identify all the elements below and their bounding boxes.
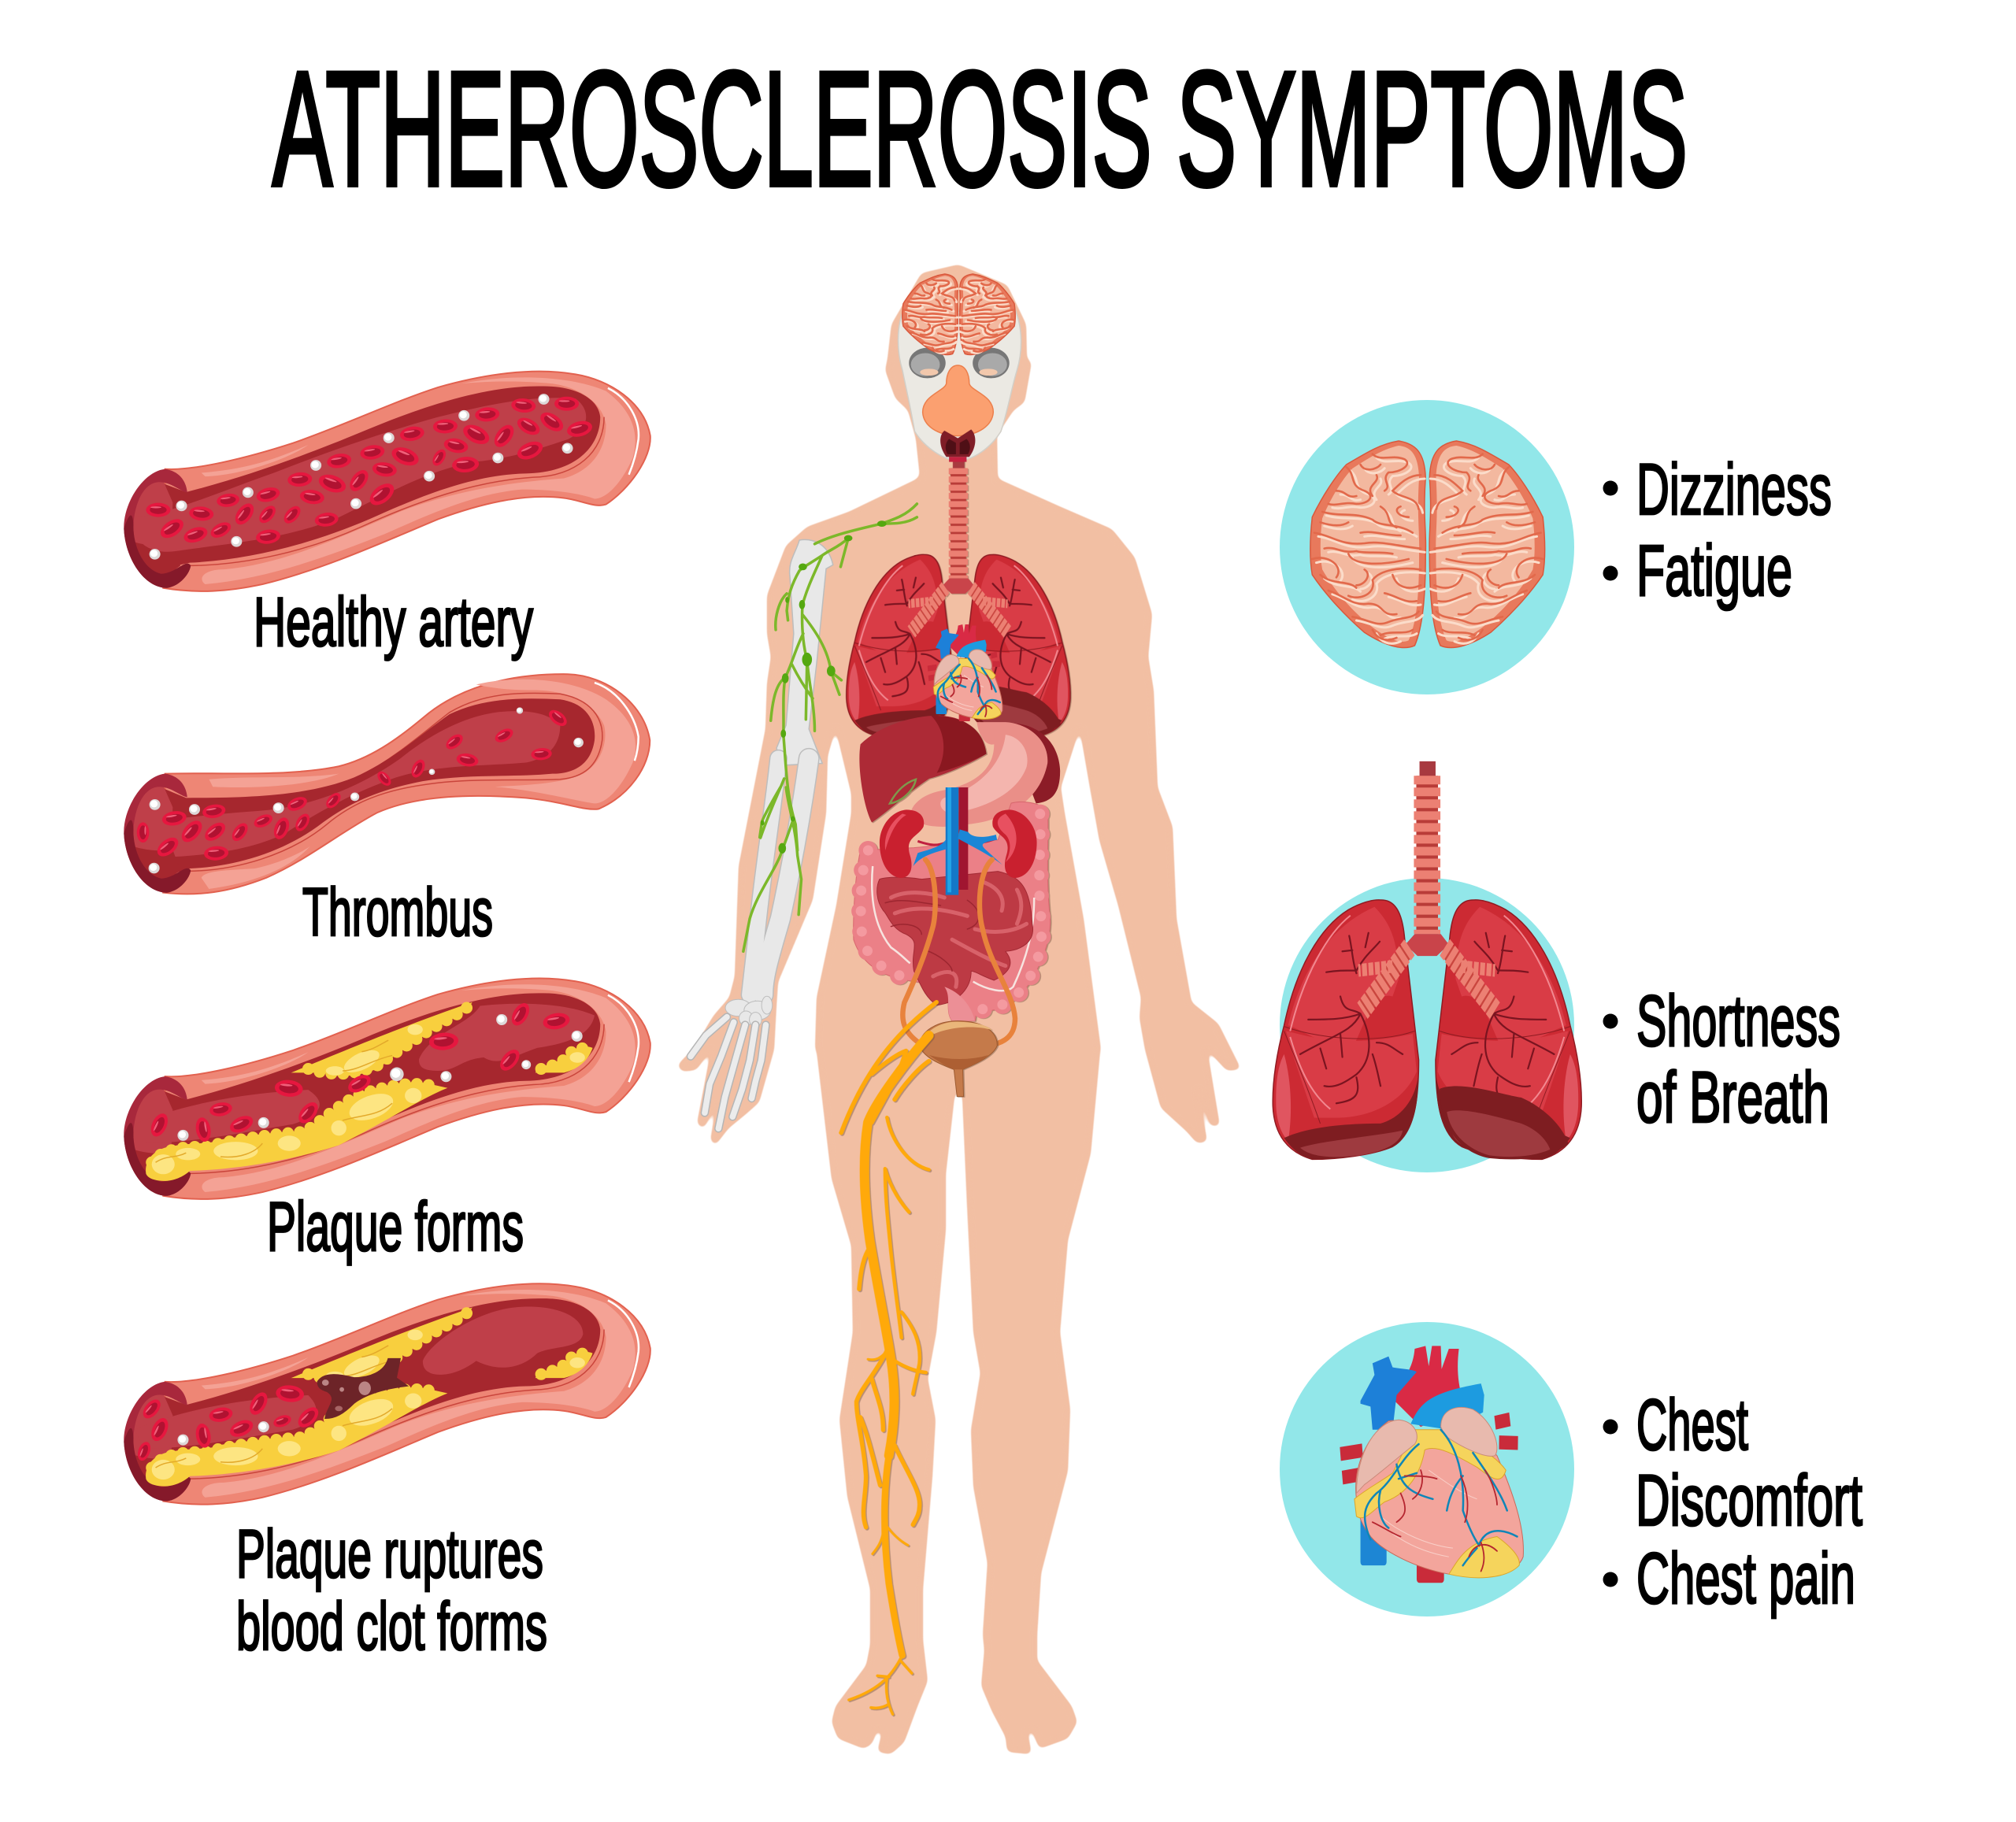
large and small intestine xyxy=(854,802,1051,1021)
artery: plaque forms xyxy=(124,978,650,1199)
panel: brain symptoms xyxy=(1280,400,1832,694)
brain in head xyxy=(902,274,1015,354)
circle backdrop: brain xyxy=(1280,400,1574,694)
blood clot xyxy=(318,1359,406,1418)
artery: plaque ruptures xyxy=(124,1283,650,1505)
list: chest discomfort and chest pain: Chest xyxy=(1636,1385,1748,1465)
panel: artery stages xyxy=(124,372,650,1665)
list: chest discomfort and chest pain: Chest pain xyxy=(1636,1539,1855,1619)
stomach xyxy=(910,722,1060,827)
circle backdrop: lungs xyxy=(1280,878,1574,1172)
icon: lungs xyxy=(1273,761,1581,1159)
nasal cavity xyxy=(923,365,993,436)
liver xyxy=(859,716,987,823)
list: chest discomfort and chest pain: Discomfort xyxy=(1636,1461,1862,1541)
body silhouette xyxy=(677,265,1241,1754)
lymph vessels xyxy=(743,504,917,951)
heart in chest xyxy=(928,624,1002,721)
list: dizziness and fatigue: Dizziness xyxy=(1636,450,1832,530)
panel: lung symptoms xyxy=(1273,761,1840,1172)
label: thrombus: Thrombus xyxy=(302,875,493,950)
artery: thrombus xyxy=(124,674,650,894)
pharynx xyxy=(940,429,975,462)
label: healthy artery: Healthy artery xyxy=(254,583,533,661)
icon: heart xyxy=(1340,1346,1523,1583)
list: dizziness and fatigue: Fatigue xyxy=(1636,531,1792,611)
panel: body figure xyxy=(677,265,1241,1754)
list: shortness of breath: Shortness xyxy=(1636,981,1840,1061)
lungs and trachea xyxy=(847,458,1070,735)
list: dizziness and fatigue xyxy=(1603,450,1832,611)
icon: brain xyxy=(1310,441,1545,648)
label: plaque ruptures blood clot forms: Plaque ruptures xyxy=(236,1516,543,1592)
list: shortness of breath: of Breath xyxy=(1636,1057,1829,1138)
arm skeleton xyxy=(691,539,833,1128)
artery: healthy xyxy=(124,372,650,591)
list: chest discomfort and chest pain xyxy=(1603,1385,1862,1619)
sciatic nerve xyxy=(841,1002,936,1714)
label: plaque ruptures blood clot forms: blood clot forms xyxy=(236,1589,547,1665)
kidneys and vessels xyxy=(880,787,1037,1043)
list: shortness of breath xyxy=(1603,981,1840,1138)
panel: heart symptoms xyxy=(1280,1322,1862,1619)
circle backdrop: heart xyxy=(1280,1322,1574,1616)
label: plaque forms: Plaque forms xyxy=(267,1187,524,1265)
skull xyxy=(899,309,1021,461)
bladder xyxy=(920,1021,997,1097)
label: plaque ruptures blood clot forms xyxy=(236,1516,547,1665)
